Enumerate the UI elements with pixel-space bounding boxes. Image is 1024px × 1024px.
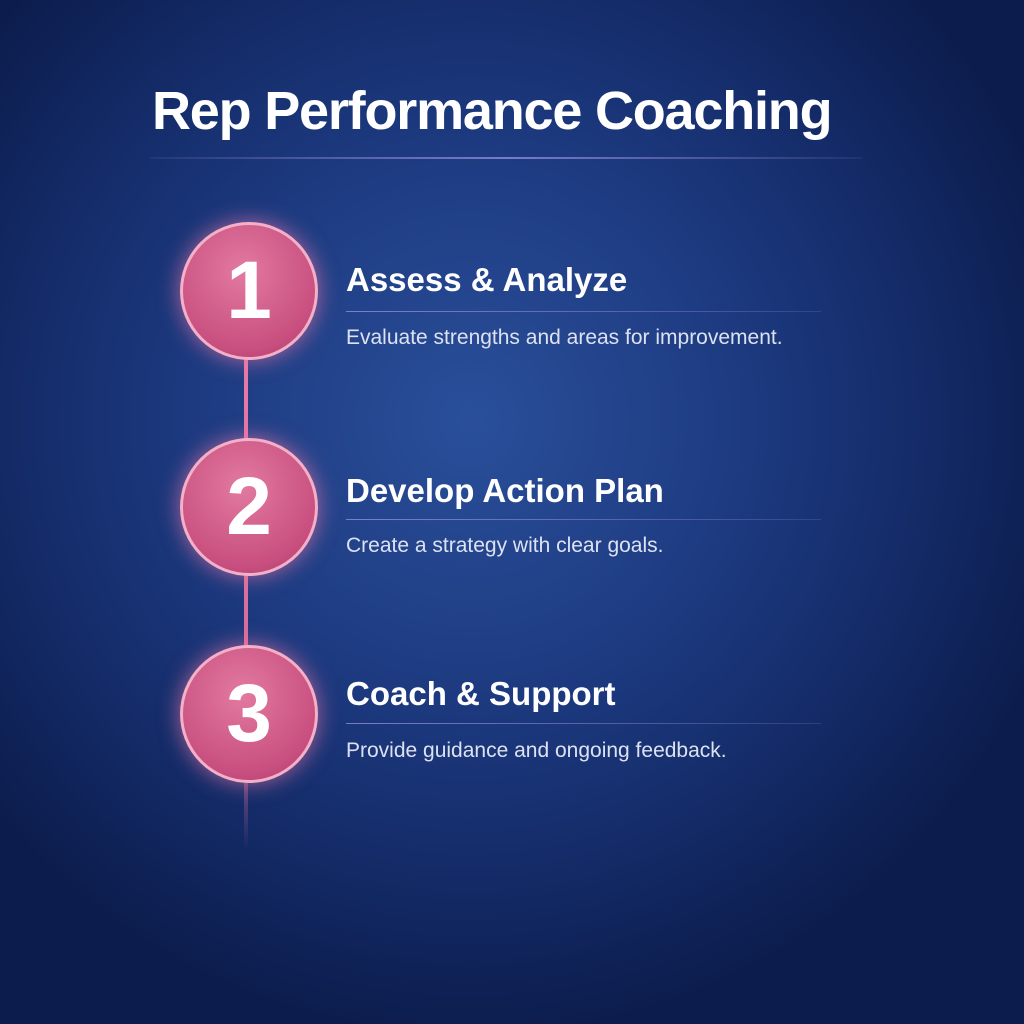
step 2 circle: 2 bbox=[226, 461, 272, 552]
step 2 description: Create a strategy with clear goals. bbox=[346, 534, 663, 557]
step 1 circle: 1 bbox=[226, 245, 272, 336]
step 1 heading: Assess & Analyze bbox=[346, 261, 627, 298]
step 3 description: Provide guidance and ongoing feedback. bbox=[346, 739, 727, 762]
step 3 circle: 3 bbox=[226, 668, 272, 759]
connector line bbox=[244, 350, 248, 850]
step 1 circle bbox=[180, 222, 318, 360]
step 3 circle bbox=[180, 645, 318, 783]
step 2 circle bbox=[180, 438, 318, 576]
step 3 heading: Coach & Support bbox=[346, 675, 616, 712]
step 1 description: Evaluate strengths and areas for improvement. bbox=[346, 326, 783, 349]
step 2 heading: Develop Action Plan bbox=[346, 472, 664, 509]
title: Rep Performance Coaching bbox=[152, 81, 831, 141]
